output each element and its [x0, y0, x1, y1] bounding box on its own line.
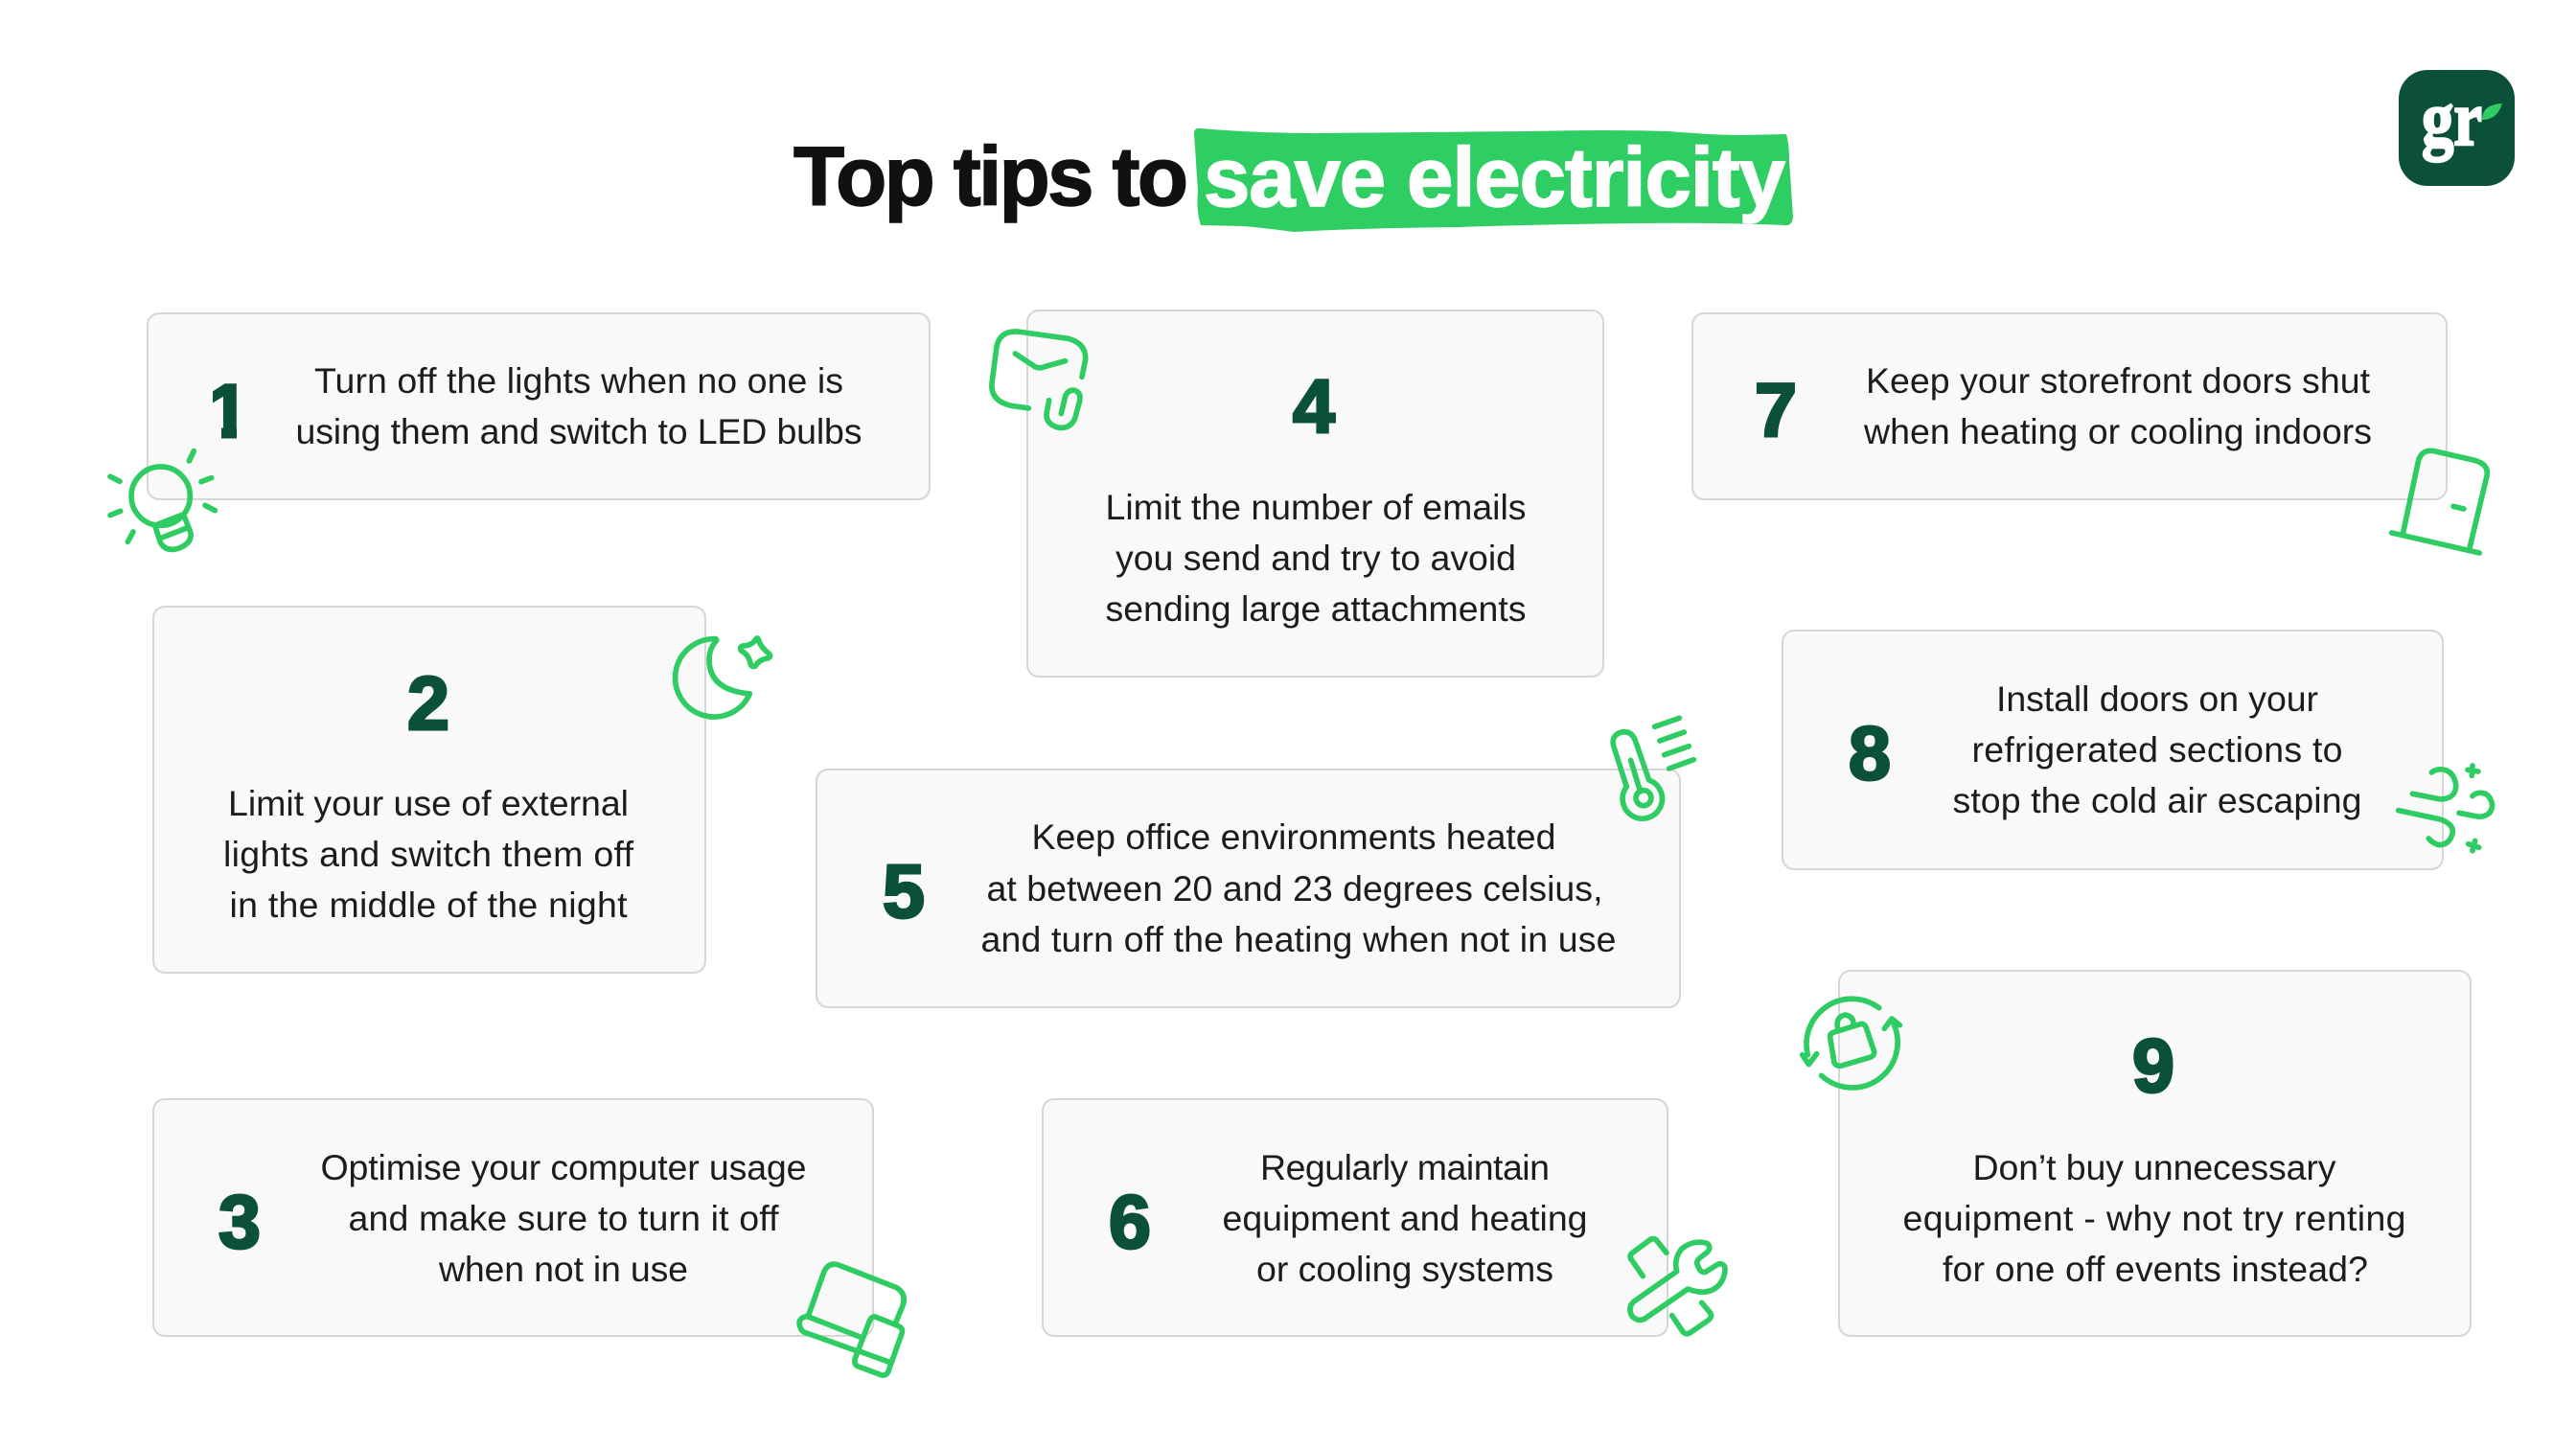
logo letters: gr — [2422, 75, 2482, 162]
card 4 background — [1027, 310, 1603, 677]
panel: tip 6 — [1043, 1099, 1668, 1336]
number 4: 4 — [1293, 363, 1335, 448]
panel: tip 8 — [1782, 631, 2443, 869]
tip 6 text — [1223, 1147, 1587, 1289]
card 3 background — [153, 1099, 873, 1336]
tip 3 text: and make sure to turn it off — [349, 1198, 779, 1238]
tip 2 text: Limit your use of external — [228, 783, 629, 823]
icon: wrench and screwdriver — [1630, 1239, 1725, 1334]
panel: tip 4 — [1027, 310, 1603, 677]
tip 9 text: Don’t buy unnecessary — [1972, 1147, 2336, 1187]
tip 9 text: for one off events instead? — [1943, 1249, 2368, 1289]
logo background — [2399, 70, 2515, 186]
tip 6 text: equipment and heating — [1223, 1198, 1587, 1238]
icon: moon and star — [676, 638, 770, 717]
tip 7 text: when heating or cooling indoors — [1863, 411, 2372, 451]
panel: tip 7 — [1692, 313, 2447, 499]
card 9 background — [1839, 971, 2471, 1336]
tip 2 text — [223, 783, 634, 925]
card 2 background — [153, 607, 705, 973]
logo leaf — [2482, 104, 2502, 120]
card 6 background — [1043, 1099, 1668, 1336]
tip 7 text: Keep your storefront doors shut — [1866, 360, 2371, 401]
icon: email with paperclip — [992, 332, 1086, 427]
panel: tip 3 — [153, 1099, 873, 1336]
tip 6 text: Regularly maintain — [1260, 1147, 1550, 1187]
icon: door — [2392, 450, 2487, 553]
icon: thermometer — [1613, 718, 1693, 818]
tip 7 text — [1863, 360, 2372, 451]
tip 2 text: lights and switch them off — [223, 834, 634, 874]
tip 8 text: Install doors on your — [1996, 678, 2318, 719]
icon: light bulb — [110, 451, 215, 549]
panel: tip 1 — [148, 313, 930, 499]
title: highlighted text: save electricity — [1204, 131, 1785, 224]
number 8: 8 — [1849, 710, 1891, 795]
tip 3 text: Optimise your computer usage — [320, 1147, 807, 1187]
tip 8 text: stop the cold air escaping — [1953, 780, 2361, 820]
card 8 background — [1782, 631, 2443, 869]
tip 4 text: you send and try to avoid — [1116, 538, 1516, 578]
tip 1 text — [295, 360, 862, 451]
tip 1 text: Turn off the lights when no one is — [314, 360, 843, 401]
tip 9 text: equipment - why not try renting — [1903, 1198, 2405, 1238]
title: black text: Top tips to — [794, 130, 1188, 223]
number 9: 9 — [2132, 1023, 2174, 1108]
tip 6 text: or cooling systems — [1256, 1249, 1553, 1289]
title — [794, 128, 1793, 232]
tip 4 text: sending large attachments — [1106, 588, 1526, 629]
tip 8 text: refrigerated sections to — [1972, 729, 2342, 770]
tip 5 text: at between 20 and 23 degrees celsius, — [987, 868, 1602, 908]
icon: cold air wind — [2399, 766, 2493, 851]
tip 2 text: in the middle of the night — [230, 885, 628, 925]
panel: tip 5 — [816, 770, 1680, 1007]
panel: tip 9 — [1839, 971, 2471, 1336]
tip 1 text: using them and switch to LED bulbs — [295, 411, 862, 451]
card 1 background — [148, 313, 930, 499]
tip 5 text: Keep office environments heated — [1031, 816, 1556, 857]
card 7 background — [1692, 313, 2447, 499]
tip 3 text: when not in use — [438, 1249, 688, 1289]
icon: laptop and phone — [799, 1264, 904, 1375]
tip 5 text: and turn off the heating when not in use — [981, 919, 1616, 959]
tip 4 text — [1106, 487, 1526, 629]
panel: tip 2 — [153, 607, 705, 973]
number 2: 2 — [407, 660, 449, 746]
number 5: 5 — [883, 848, 925, 933]
title highlight brush stroke — [1194, 128, 1793, 232]
card 5 background — [816, 770, 1680, 1007]
number 6: 6 — [1109, 1179, 1151, 1264]
tip 3 text — [320, 1147, 807, 1289]
logo — [2399, 70, 2515, 186]
number 3: 3 — [218, 1179, 261, 1264]
tip 4 text: Limit the number of emails — [1106, 487, 1526, 527]
tip 8 text — [1953, 678, 2361, 820]
tip 9 text — [1903, 1147, 2405, 1289]
number 1: 1 — [207, 368, 249, 453]
number 7: 7 — [1755, 367, 1797, 452]
icon: reusable shopping bag — [1803, 999, 1899, 1088]
tip 5 text — [981, 816, 1616, 959]
